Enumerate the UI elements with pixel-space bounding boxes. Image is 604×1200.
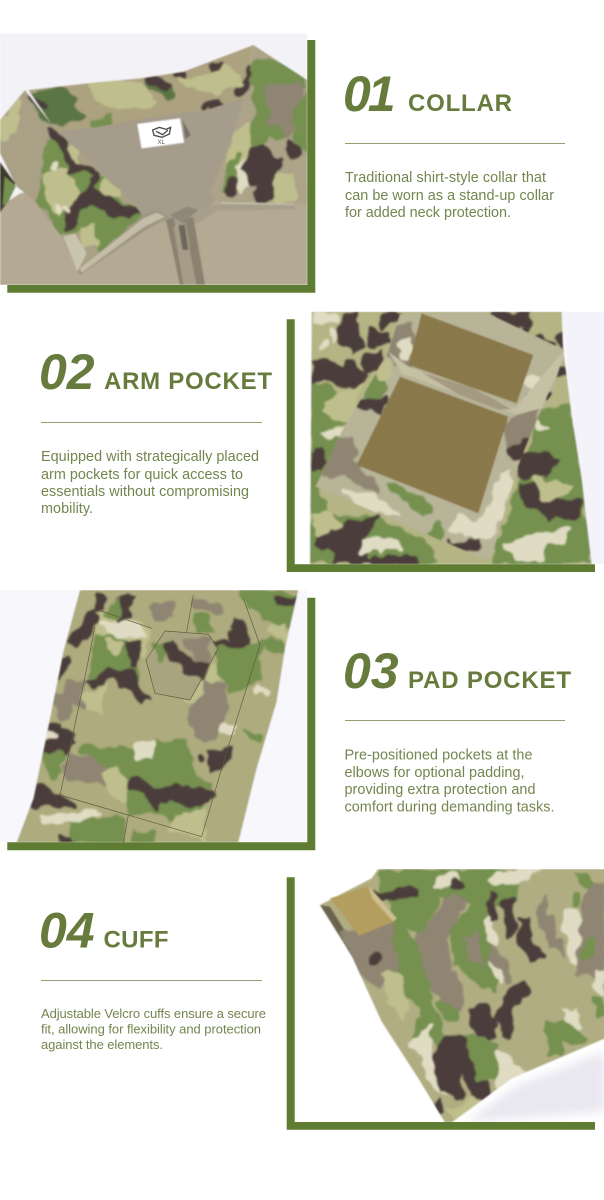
description: arm pocket xyxy=(41,449,259,517)
frame: L-shaped green border xyxy=(287,877,595,1130)
frame: L-shaped green border xyxy=(7,40,315,293)
description: arm pocket: arm pockets for quick access to xyxy=(41,467,243,483)
number 01: 01 xyxy=(343,66,394,122)
description: cuff xyxy=(41,1006,266,1052)
description: cuff: against the elements. xyxy=(41,1037,163,1052)
description: pad pocket: comfort during demanding tasks. xyxy=(344,800,554,816)
description: pad pocket: providing extra protection and xyxy=(344,782,536,798)
panel: arm pocket xyxy=(39,312,604,572)
description: pad pocket: elbows for optional padding, xyxy=(344,765,524,781)
description: collar: for added neck protection. xyxy=(345,205,511,221)
photo: shirt collar xyxy=(0,33,307,285)
tag size text: XL xyxy=(158,140,166,146)
panel: collar xyxy=(0,33,565,293)
heading: cuff: CUFF xyxy=(104,926,168,954)
icon: collar tag logo xyxy=(153,127,171,137)
panel: pad pocket xyxy=(0,590,571,850)
description: arm pocket: mobility. xyxy=(41,501,93,517)
panel: cuff xyxy=(39,869,604,1130)
description: collar xyxy=(345,170,554,221)
description: collar: Traditional shirt-style collar that xyxy=(345,170,546,186)
description: pad pocket xyxy=(344,748,554,816)
frame: L-shaped green border xyxy=(287,319,595,572)
frame: L-shaped green border xyxy=(7,598,315,850)
number 02: 02 xyxy=(39,344,95,400)
description: collar: can be worn as a stand-up collar xyxy=(345,188,554,204)
heading: arm pocket: ARM POCKET xyxy=(104,368,272,395)
description: arm pocket: Equipped with strategically placed xyxy=(41,449,259,465)
description: cuff: Adjustable Velcro cuffs ensure a secure xyxy=(41,1006,266,1021)
photo: velcro cuff xyxy=(295,869,604,1122)
number 03: 03 xyxy=(343,643,399,699)
description: arm pocket: essentials without compromising xyxy=(41,484,249,500)
description: pad pocket: Pre-positioned pockets at the xyxy=(344,748,532,764)
photo: arm pocket with velcro xyxy=(295,312,604,564)
number 04: 04 xyxy=(39,902,95,958)
description: cuff: fit, allowing for flexibility and protection xyxy=(41,1022,261,1036)
photo: elbow pad pocket xyxy=(0,590,307,842)
heading: pad pocket: PAD POCKET xyxy=(408,667,571,694)
heading: collar: COLLAR xyxy=(408,90,512,117)
pocket stitching xyxy=(60,595,260,842)
